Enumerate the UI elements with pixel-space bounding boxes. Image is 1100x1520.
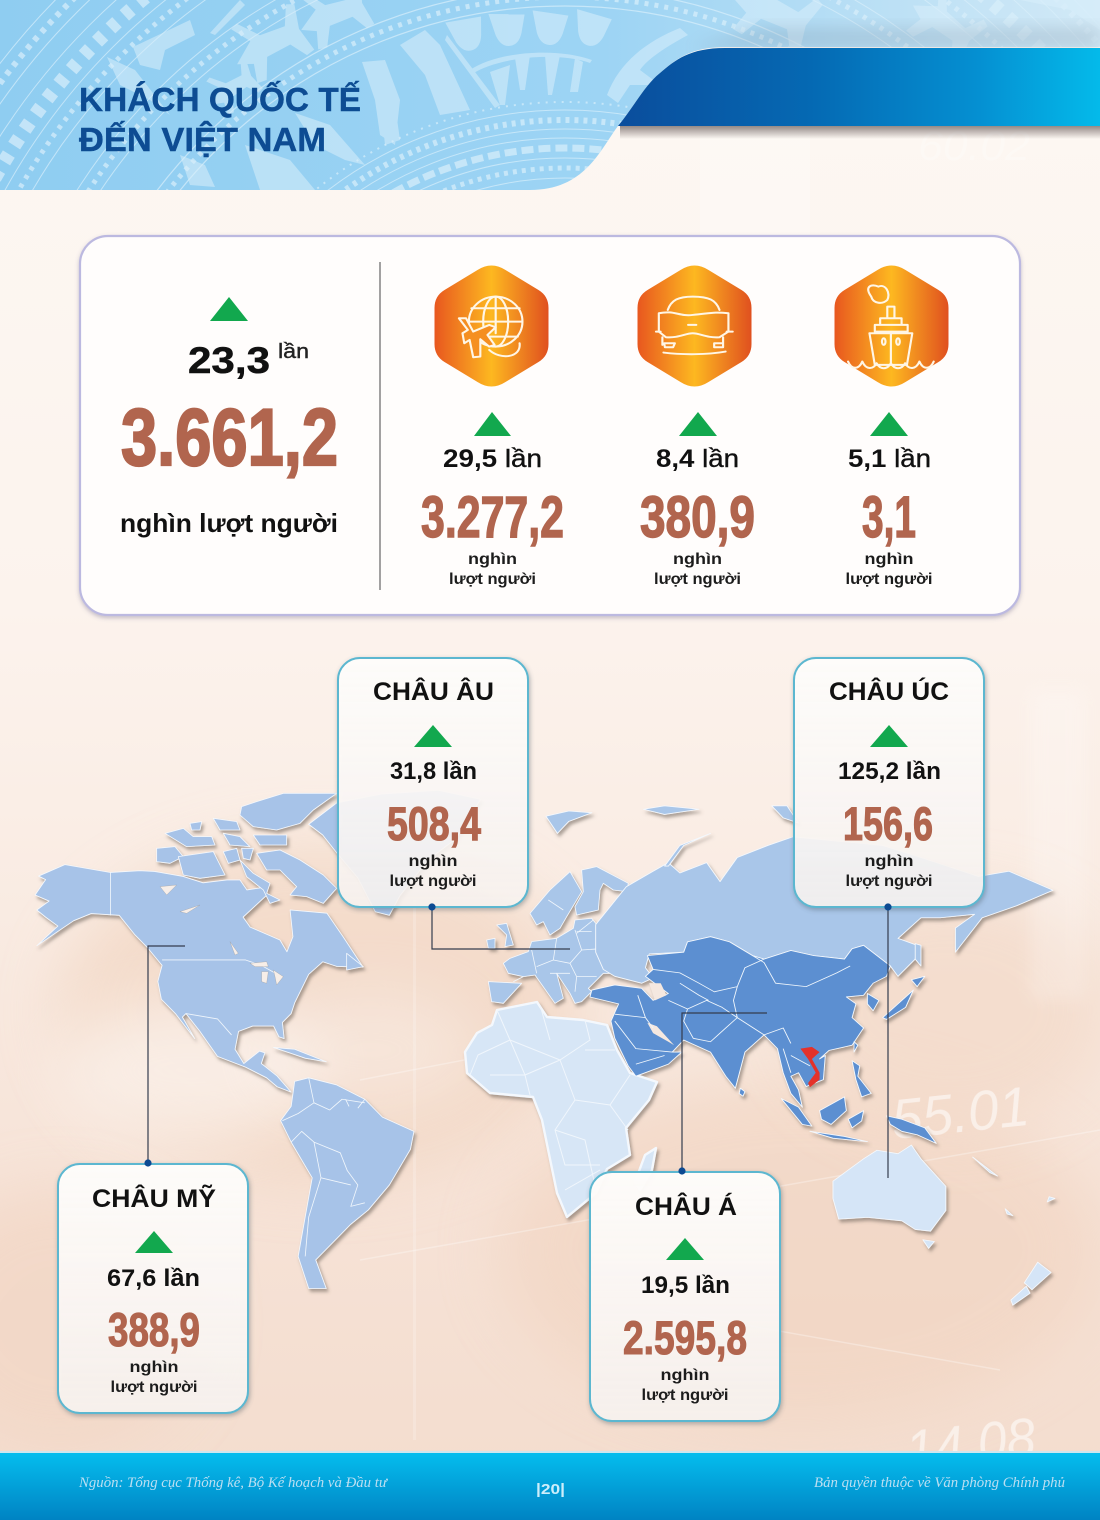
- road growth: [656, 412, 739, 473]
- card: châu úc: 156,6: [843, 797, 933, 850]
- card: châu mỹ: 388,9: [108, 1303, 200, 1356]
- card: châu mỹ: lượt người: [110, 1379, 198, 1396]
- card: châu âu: CHÂU ÂU: [373, 676, 494, 706]
- header ribbon: [618, 28, 1100, 139]
- sea growth: 5,1 lần: [848, 445, 931, 473]
- card: châu âu: 31,8 lần: [390, 758, 477, 785]
- total growth: lần: [278, 341, 309, 363]
- footer page number: |20|: [536, 1481, 565, 1498]
- title: [79, 80, 361, 158]
- leader line: châu úc: [887, 907, 889, 1178]
- australia: [833, 1145, 1055, 1305]
- footer: [0, 1451, 1100, 1520]
- card: châu á: [590, 1172, 780, 1421]
- card: châu úc: [794, 658, 984, 907]
- sea growth: [848, 412, 931, 473]
- card: châu á: CHÂU Á: [635, 1191, 737, 1221]
- card: châu á: 2.595,8: [623, 1311, 747, 1364]
- header band with drum pattern: [0, 0, 1100, 190]
- card: châu úc: lượt người: [846, 873, 932, 890]
- leader line: châu âu: [432, 907, 570, 949]
- card dot: châu úc: [884, 903, 892, 911]
- air growth: [443, 412, 542, 473]
- russia and arctic islands: [546, 806, 1055, 1305]
- footer copyright: Bản quyền thuộc về Văn phòng Chính phủ: [814, 1475, 1065, 1491]
- sea unit: nghìn: [864, 551, 914, 568]
- sea unit: [846, 551, 932, 588]
- background numbers: 55.01: [888, 1074, 1032, 1151]
- air unit: nghìn: [468, 551, 517, 568]
- leader line: châu á: [682, 1013, 767, 1171]
- leader line: châu mỹ: [148, 946, 185, 1163]
- icon: airplane and globe: [434, 266, 548, 386]
- card: châu mỹ: CHÂU MỸ: [92, 1183, 216, 1213]
- title: KHÁCH QUỐC TẾ: [79, 80, 361, 118]
- asia: [590, 937, 936, 1143]
- total growth: [188, 297, 309, 381]
- road unit: [654, 551, 741, 588]
- road number: 380,9: [640, 485, 755, 550]
- sea unit: lượt người: [846, 571, 932, 588]
- card: châu á: lượt người: [642, 1387, 728, 1404]
- card dot: châu mỹ: [144, 1159, 152, 1167]
- europe: [487, 867, 628, 1003]
- card: châu á: nghìn: [660, 1367, 710, 1384]
- card dot: châu á: [678, 1167, 686, 1175]
- card: châu úc: nghìn: [864, 853, 914, 870]
- panel: totals: [80, 236, 1020, 615]
- card: châu mỹ: [58, 1164, 248, 1413]
- card dot: châu âu: [428, 903, 436, 911]
- card: châu mỹ: nghìn: [130, 1359, 178, 1376]
- air number: 3.277,2: [421, 485, 564, 550]
- total number: 3.661,2: [121, 393, 338, 483]
- footer source: Nguồn: Tổng cục Thống kê, Bộ Kế hoạch và Đầu tư: [78, 1475, 388, 1491]
- air growth: 29,5 lần: [443, 445, 542, 473]
- air unit: [449, 551, 536, 588]
- total growth: 23,3: [188, 340, 270, 381]
- vietnam: [800, 1047, 820, 1087]
- card: châu úc: 125,2 lần: [838, 758, 941, 785]
- card: châu á: 19,5 lần: [641, 1272, 730, 1299]
- card: châu mỹ: 67,6 lần: [107, 1265, 200, 1292]
- title: ĐẾN VIỆT NAM: [79, 121, 326, 158]
- north america: [35, 790, 481, 1289]
- sea number: 3,1: [862, 485, 916, 550]
- card: châu âu: 508,4: [387, 797, 481, 850]
- background numbers: 14.08: [902, 1405, 1038, 1482]
- card: châu âu: nghìn: [408, 853, 458, 870]
- road unit: lượt người: [654, 571, 741, 588]
- icon: car: [638, 266, 752, 386]
- arctic islands and canadian lakes: [157, 793, 363, 985]
- south america: [281, 1078, 414, 1289]
- total unit: nghìn lượt người: [120, 508, 338, 538]
- world map: [35, 790, 1055, 1305]
- stylised drum figures: [446, 16, 482, 51]
- icon: ship: [834, 266, 948, 386]
- road unit: nghìn: [673, 551, 722, 568]
- background numbers: [888, 122, 1038, 1482]
- air unit: lượt người: [449, 571, 536, 588]
- background numbers: 60.02: [918, 122, 1030, 169]
- africa: [465, 1002, 657, 1217]
- card: châu âu: [338, 658, 528, 907]
- road growth: 8,4 lần: [656, 445, 739, 473]
- card: châu úc: CHÂU ÚC: [829, 676, 949, 706]
- card: châu âu: lượt người: [390, 873, 476, 890]
